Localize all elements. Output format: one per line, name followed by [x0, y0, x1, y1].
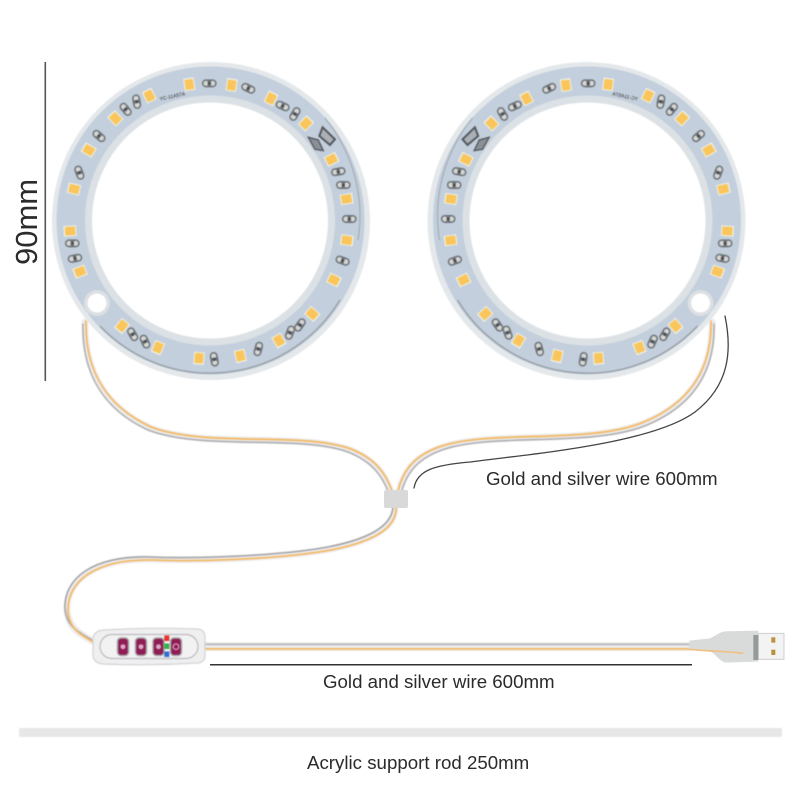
indicator: blue: [164, 652, 169, 657]
ring light: left: [52, 62, 370, 380]
button 2: [136, 638, 146, 656]
PCB marking: YC-11A57A: [159, 91, 186, 103]
indicator: red: [164, 636, 169, 641]
LED chips: [63, 77, 354, 365]
solder pads: [65, 79, 357, 367]
wire: black measurement line: [414, 316, 728, 488]
indicator: green: [164, 644, 169, 649]
dimension line: 90mm: [44, 62, 46, 381]
label: upper wire length: Gold and silver wire 600mm: [486, 468, 718, 489]
wire: right ring to splitter: [398, 321, 714, 494]
label: lower wire length: Gold and silver wire 600mm: [323, 671, 555, 692]
acrylic support rod: [19, 728, 782, 737]
button 3: [153, 638, 164, 656]
wires: gold and silver cables: [65, 321, 714, 643]
controller: [93, 628, 205, 665]
mounting hole: [84, 290, 110, 316]
button 4: [170, 638, 182, 656]
cable clip: [384, 490, 408, 508]
ring light: right (mirrored): [428, 62, 746, 380]
PCB components: [63, 77, 357, 367]
button 1: [118, 638, 128, 656]
dimension line: lower wire: [210, 664, 692, 666]
USB plug: [689, 631, 784, 663]
wire: splitter to controller: [65, 503, 396, 643]
label: rod length: Acrylic support rod 250mm: [307, 752, 529, 773]
main cable to USB: [204, 642, 692, 651]
label: 90mm: 90mm: [9, 179, 44, 265]
wire: left ring to splitter: [83, 321, 392, 494]
